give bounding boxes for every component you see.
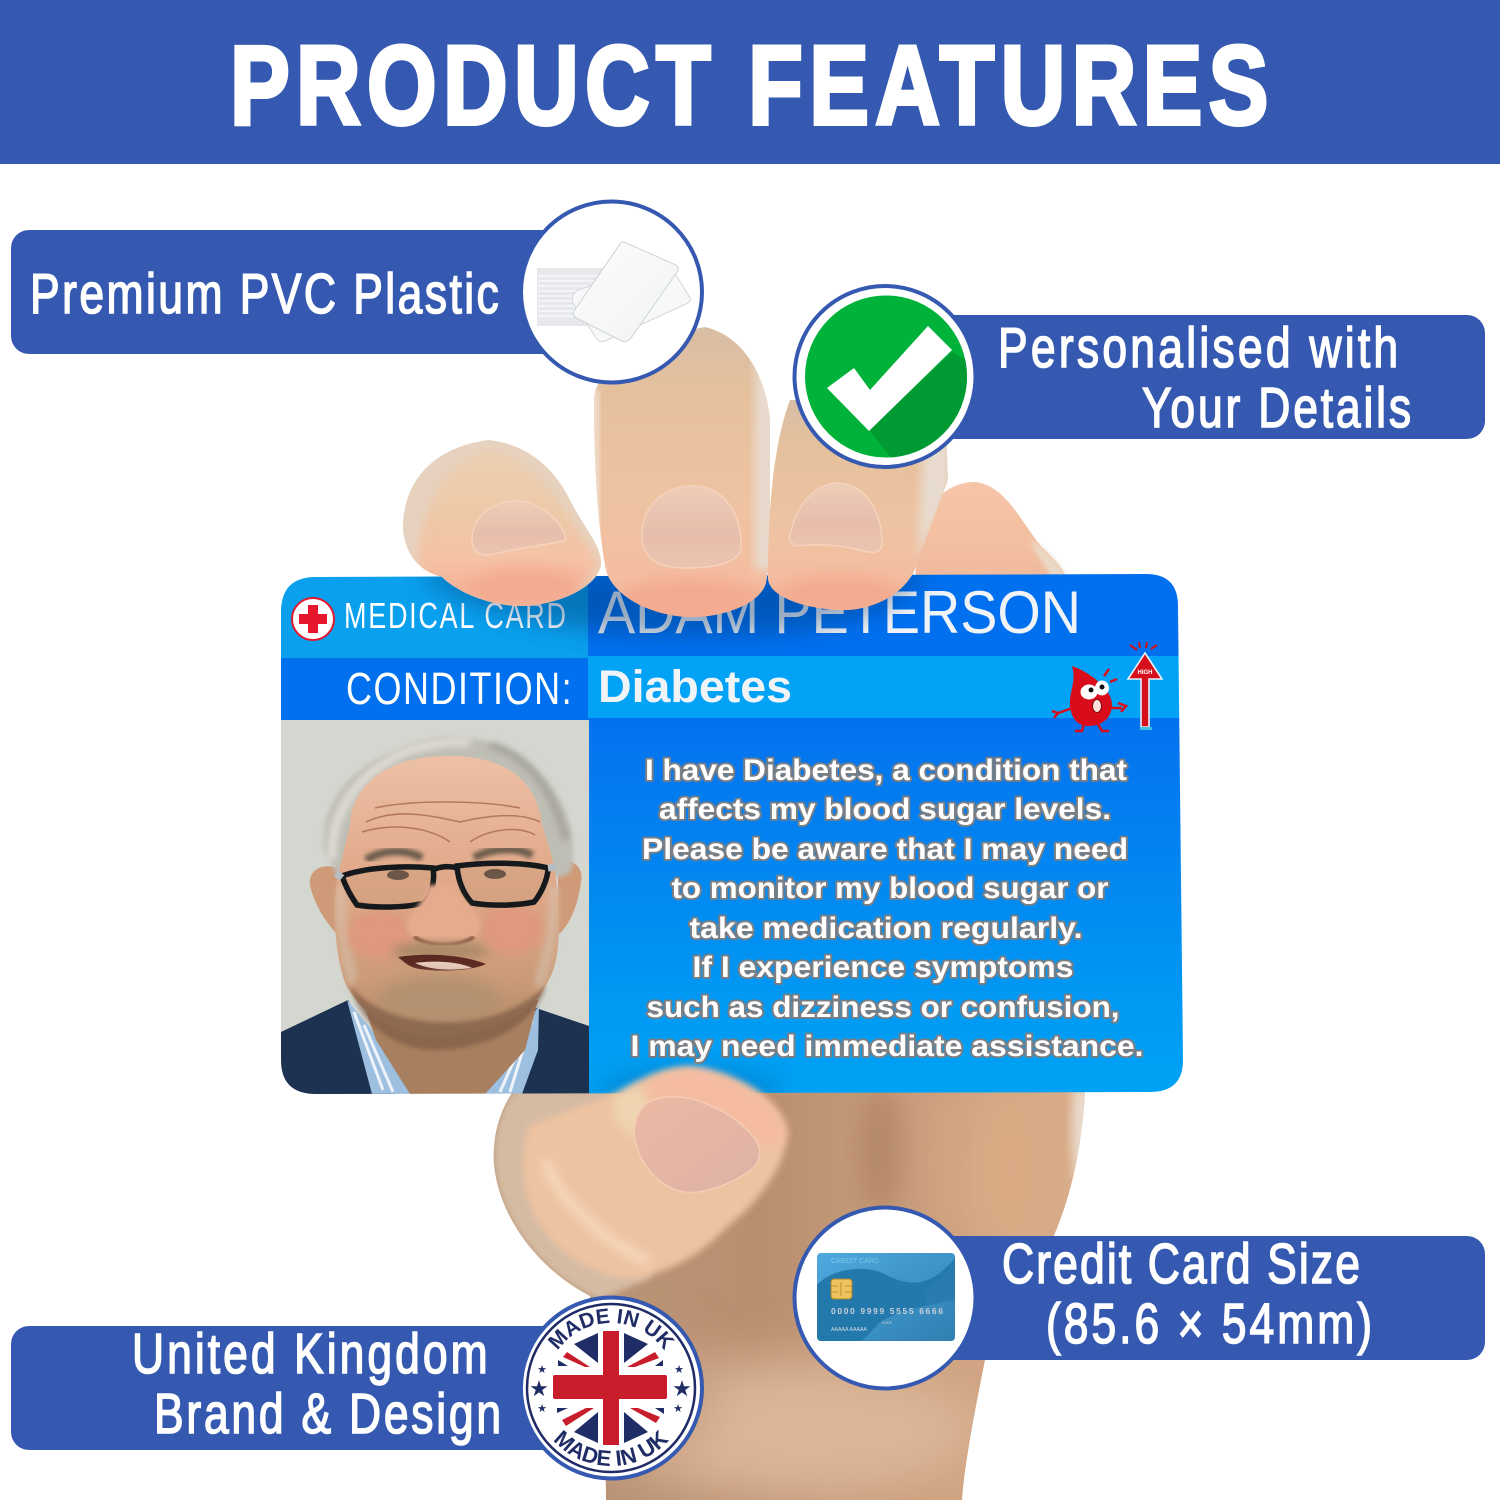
cheeks <box>348 911 412 959</box>
hand behind card <box>494 482 1092 1500</box>
label text line 1: Personalised with <box>998 316 1398 379</box>
portrait photo <box>281 720 589 1094</box>
icon: green check mark <box>805 296 985 470</box>
palm shading <box>494 1070 1092 1500</box>
badge circle <box>521 1298 702 1478</box>
icon: high arrow <box>1128 642 1162 730</box>
ring fingernail <box>789 483 882 552</box>
eyebrows <box>366 849 532 860</box>
label text line 2: (85.6 × 54mm) <box>1046 1292 1372 1355</box>
message text: I have Diabetes, a condition that <box>645 754 1127 787</box>
medical card label: MEDICAL CARD <box>344 595 566 636</box>
moustache shadow <box>390 942 490 960</box>
seal stars: ★ <box>673 1403 683 1415</box>
condition left panel <box>275 658 589 720</box>
message text: If I experience symptoms <box>692 951 1074 984</box>
thumb shadow on card <box>595 1066 785 1118</box>
condition name: Diabetes <box>598 661 792 712</box>
label bar <box>930 315 1485 439</box>
left fingernail <box>472 501 566 555</box>
label bar <box>11 230 571 354</box>
seal bottom text: MADE IN UK <box>554 1430 670 1466</box>
message text: affects my blood sugar levels. <box>659 793 1111 826</box>
condition label: CONDITION: <box>346 663 572 714</box>
red cross icon <box>292 598 334 640</box>
cardholder name: ADAM PETERSON <box>598 579 1081 646</box>
stubble sides <box>336 885 559 995</box>
callout: personalised with your details <box>794 286 1485 470</box>
header left panel <box>275 570 589 658</box>
photo backdrop <box>281 720 589 1094</box>
label bar <box>930 1236 1485 1360</box>
darker hair tone <box>490 745 566 840</box>
seal stars: ★ <box>672 1376 692 1401</box>
seal stars: ★ <box>529 1376 549 1401</box>
pale hair tone <box>332 742 470 860</box>
finger shadow on card <box>420 570 925 636</box>
callout: premium PVC plastic <box>11 202 702 382</box>
sweater <box>281 1000 589 1094</box>
header banner <box>0 0 1500 164</box>
icon: credit card: 00/00 <box>882 1320 893 1325</box>
seal stars <box>529 1364 692 1415</box>
icon: blood drop mascot <box>1052 666 1126 731</box>
thumb body <box>523 1067 787 1278</box>
seal stars: ★ <box>674 1364 684 1376</box>
label text line 2: Your Details <box>1142 376 1411 439</box>
label text line 1: Credit Card Size <box>1002 1232 1360 1295</box>
message text <box>630 754 1144 1063</box>
icon: credit card: AAAAA AAAAA <box>831 1327 867 1333</box>
callout: united kingdom brand and design <box>11 1296 704 1480</box>
middle finger <box>590 320 775 625</box>
ring finger <box>765 395 955 615</box>
icon: high arrow: HIGH <box>1138 670 1152 676</box>
icon: stack of plastic cards <box>537 242 690 342</box>
ears <box>310 861 581 935</box>
seal stars: ★ <box>537 1403 547 1415</box>
pinky finger <box>915 482 1067 580</box>
label text line 2: Brand & Design <box>154 1382 501 1445</box>
nose <box>407 885 481 946</box>
face <box>335 756 559 1036</box>
hair <box>324 737 573 880</box>
badge circle <box>794 1208 976 1388</box>
shirt collar <box>347 1000 539 1094</box>
mouth <box>398 955 486 971</box>
palm <box>494 1090 1085 1500</box>
thumbnail <box>634 1097 760 1193</box>
seal stars: ★ <box>537 1364 547 1376</box>
message text: to monitor my blood sugar or <box>672 872 1109 905</box>
badge circle <box>794 286 976 467</box>
union flag <box>553 1331 667 1445</box>
condition right panel <box>588 656 1188 718</box>
fingers in front of card <box>395 320 955 1278</box>
forehead wrinkles <box>362 802 540 842</box>
message text: such as dizziness or confusion, <box>646 991 1120 1024</box>
icon: credit card <box>817 1253 955 1341</box>
left finger <box>395 430 610 615</box>
neck <box>362 1000 538 1094</box>
pinky highlight <box>1030 540 1067 580</box>
title: PRODUCT FEATURES <box>230 24 1268 148</box>
icon: credit card: CREDIT CARD <box>831 1258 879 1265</box>
middle fingernail <box>642 486 741 568</box>
badge circle <box>521 202 702 382</box>
label text line 1: United Kingdom <box>132 1322 488 1385</box>
header right panel <box>588 570 1188 656</box>
icon: made in UK seal <box>526 1302 696 1474</box>
seal top text: MADE IN UK <box>548 1308 675 1350</box>
callout: credit card size <box>794 1208 1485 1388</box>
icon: credit card: 0000 9999 5555 6666 <box>831 1306 943 1316</box>
message panel <box>589 718 1189 1098</box>
thumb base pale glow <box>612 1085 650 1140</box>
thumb silhouette pale edge <box>494 1090 650 1300</box>
message text: I may need immediate assistance. <box>630 1030 1144 1063</box>
message text: take medication regularly. <box>690 912 1082 945</box>
label bar <box>11 1326 571 1450</box>
label text: Premium PVC Plastic <box>30 262 499 325</box>
eyes <box>387 870 409 880</box>
message text: Please be aware that I may need <box>642 833 1128 866</box>
glasses <box>342 863 548 907</box>
thumb tip glow <box>640 1069 785 1144</box>
medical ID card <box>275 570 1189 1118</box>
thumb <box>523 1067 787 1278</box>
chin stubble <box>380 976 500 1024</box>
double chin shadow <box>350 985 546 1050</box>
thumb crease glow <box>545 1160 650 1262</box>
